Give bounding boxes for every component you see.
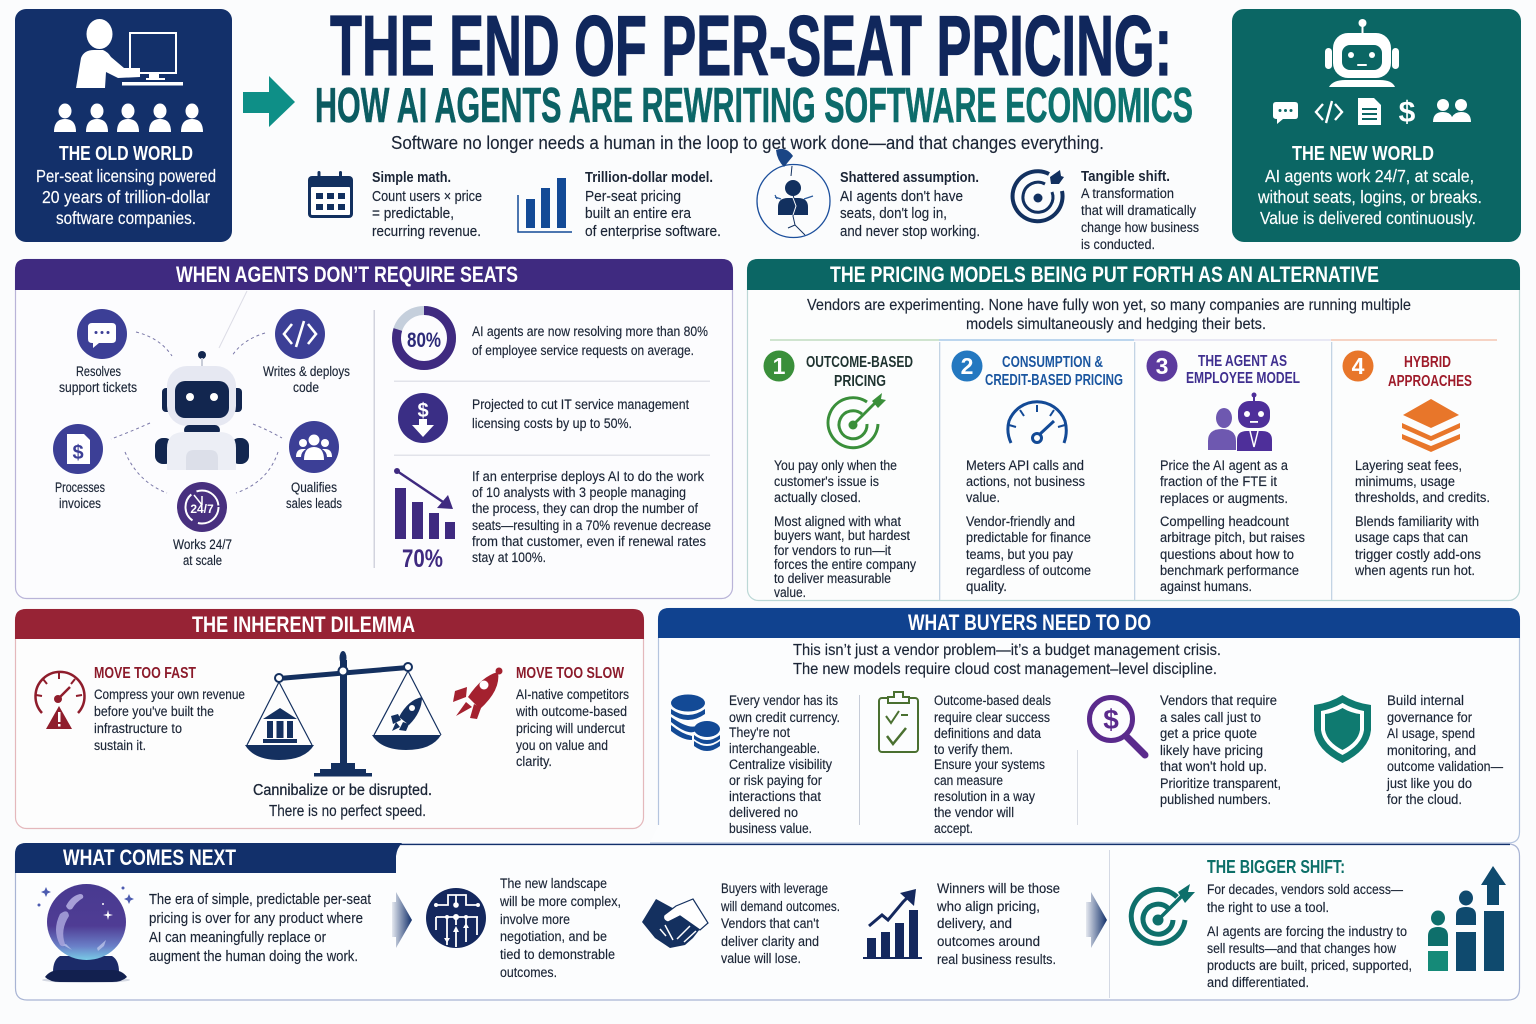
heading: the new world: THE NEW WORLD — [1292, 143, 1434, 165]
text: buyers with leverage: deliver clarity and — [721, 934, 819, 949]
icon: handshake — [642, 899, 708, 948]
text: buyers with leverage: will demand outcomes. — [720, 899, 840, 914]
item: simple math: recurring revenue. — [372, 224, 481, 240]
item: credit currency: own credit currency. — [729, 710, 840, 725]
text: the bigger shift: THE BIGGER SHIFT: — [1207, 857, 1345, 877]
item: published pricing: Prioritize transparent, — [1160, 776, 1281, 791]
text: buyers with leverage: Vendors that can't — [721, 916, 819, 931]
text: cannibalize or be disrupted: There is no perfect speed. — [269, 803, 426, 820]
text: intro: models simultaneously and hedging their bets. — [966, 316, 1266, 333]
item: credit currency: interactions that — [729, 789, 821, 804]
text: old world description — [36, 166, 216, 228]
column: consumption and credit-based pricing: Vendor-friendly and — [966, 514, 1075, 529]
column: outcome-based pricing: Most aligned with what — [774, 514, 901, 529]
item: published pricing: published numbers. — [1160, 792, 1271, 807]
text: the bigger shift — [1207, 857, 1412, 990]
text: intro — [793, 642, 1221, 678]
item: shattered assumption: Shattered assumption. — [840, 170, 979, 186]
text: new world description — [1257, 166, 1482, 228]
column: agent as employee: against humans. — [1160, 579, 1252, 594]
text: old world description: 20 years of trillion-dollar — [42, 187, 210, 207]
arrow: chevron — [392, 892, 412, 948]
column: outcome-based pricing: buyers want, but hardest — [774, 528, 910, 543]
column: consumption and credit-based pricing: quality. — [966, 579, 1007, 594]
text: intro: This isn’t just a vendor problem—it’s a budget management crisis. — [793, 642, 1221, 659]
label: qualifies sales leads: Qualifies — [291, 480, 337, 495]
icon: shattered person in circle — [757, 149, 830, 238]
text: the bigger shift: and differentiated. — [1207, 975, 1309, 990]
column: outcome-based pricing: You pay only when the — [774, 458, 897, 473]
item: published pricing: that won't hold up. — [1160, 759, 1267, 774]
item: published pricing — [1090, 693, 1281, 807]
item: simple math — [308, 170, 482, 240]
text: new world description: without seats, logins, or breaks. — [1257, 187, 1482, 207]
item: success definitions: the vendor will — [934, 805, 1014, 820]
text: cannibalize or be disrupted: Cannibalize or be disrupted. — [253, 782, 432, 799]
label: works 24/7 at scale: Works 24/7 — [173, 537, 232, 552]
column: hybrid approaches: when agents run hot. — [1354, 563, 1475, 578]
arrow: chevron — [1086, 892, 1107, 948]
icon: robot agent — [155, 351, 249, 470]
item: success definitions: definitions and data — [934, 726, 1041, 741]
column: consumption and credit-based pricing: regardless of outcome — [966, 563, 1091, 578]
column: consumption and credit-based pricing: CREDIT-BASED PRICING — [985, 372, 1123, 389]
text: buyers with leverage — [720, 881, 840, 966]
column: hybrid approaches: trigger costly add-ons — [1355, 547, 1481, 562]
panel: the inherent dilemma — [15, 609, 644, 828]
column: hybrid approaches — [1342, 350, 1490, 578]
column: hybrid approaches: HYBRID — [1404, 354, 1451, 371]
icon: magnifier with dollar: $ — [1103, 704, 1119, 735]
label: writes and deploys code — [263, 364, 350, 395]
text: buyers with leverage: value will lose. — [721, 951, 801, 966]
column: hybrid approaches: Blends familiarity with — [1355, 514, 1479, 529]
item: tangible shift — [1013, 169, 1199, 252]
column: outcome-based pricing: forces the entire company — [774, 557, 916, 572]
text: era of per-seat over: The era of simple, predictable per-seat — [149, 891, 372, 908]
icon: robot — [1325, 19, 1399, 87]
text: landscape: tied to demonstrable — [500, 947, 615, 962]
icon: target — [1013, 170, 1064, 221]
item: credit currency: delivered no — [729, 805, 798, 820]
column: outcome-based pricing: actually closed. — [774, 490, 861, 505]
arrow: old world to new world — [243, 76, 295, 127]
text: landscape: will be more complex, — [499, 894, 621, 909]
column: agent as employee: fraction of the FTE it — [1160, 474, 1277, 489]
text: move too fast: infrastructure to — [94, 721, 182, 736]
item: success definitions: Outcome-based deals — [934, 693, 1051, 708]
item: tangible shift: is conducted. — [1081, 237, 1155, 252]
text: new world description: AI agents work 24/7, at scale, — [1265, 166, 1474, 186]
item: success definitions — [879, 692, 1051, 836]
item: internal governance: for the cloud. — [1387, 792, 1462, 807]
item: success definitions: to verify them. — [934, 742, 1013, 757]
item: shattered assumption: and never stop working. — [840, 224, 980, 240]
item: internal governance — [1314, 693, 1503, 807]
label: works 24/7 at scale: at scale — [183, 553, 222, 568]
label: processes invoices: invoices — [59, 496, 101, 511]
item: tangible shift: Tangible shift. — [1081, 169, 1170, 185]
panel: what comes next — [15, 843, 1520, 1000]
item: published pricing: a sales call just to — [1160, 710, 1261, 725]
text: old world description: Per-seat licensing powered — [36, 166, 216, 186]
badge 2 — [952, 350, 982, 382]
column: consumption and credit-based pricing: actions, not business — [966, 474, 1085, 489]
text: the bigger shift: sell results—and that changes how — [1207, 941, 1396, 956]
text: 70% stat — [472, 469, 711, 565]
badge 3 — [1146, 350, 1178, 382]
item: trillion-dollar model — [518, 170, 721, 240]
text: 50% stat: Projected to cut IT service management — [472, 397, 689, 412]
column: agent as employee: EMPLOYEE MODEL — [1186, 370, 1300, 387]
icon: calendar — [308, 171, 353, 218]
column: hybrid approaches: usage caps that can — [1355, 530, 1468, 545]
badge 1 — [764, 350, 794, 382]
item: internal governance: outcome validation— — [1387, 759, 1503, 774]
column: agent as employee: arbitrage pitch, but raises — [1160, 530, 1305, 545]
column: agent as employee: Price the AI agent as a — [1160, 458, 1288, 473]
item: tangible shift: that will dramatically — [1081, 203, 1196, 218]
badge 2: 2 — [961, 353, 973, 379]
text: era of per-seat over: augment the human doing the work. — [149, 948, 358, 965]
label: works 24/7 at scale — [173, 537, 232, 568]
column: outcome-based pricing — [764, 350, 916, 600]
column: consumption and credit-based pricing: predictable for finance — [966, 530, 1091, 545]
item: internal governance: Build internal — [1387, 693, 1464, 708]
icon: red rocket — [453, 668, 502, 719]
header tab — [15, 843, 402, 873]
text: the bigger shift: For decades, vendors sold access— — [1207, 882, 1403, 897]
icon: dollar down — [398, 393, 448, 443]
text: the bigger shift: the right to use a tool. — [1207, 900, 1329, 915]
text: landscape: negotiation, and be — [500, 929, 607, 944]
icon: bank building on left pan — [263, 708, 297, 743]
panel: when agents don't require seats — [15, 259, 733, 598]
text: cannibalize or be disrupted — [253, 782, 432, 820]
badge 4: 4 — [1352, 353, 1365, 379]
badge 1: 1 — [773, 353, 786, 379]
column: consumption and credit-based pricing: teams, but you pay — [966, 547, 1073, 562]
text: new world description: Value is delivered continuously. — [1260, 208, 1476, 228]
column: consumption and credit-based pricing: value. — [966, 490, 1000, 505]
item: trillion-dollar model: Trillion-dollar model. — [585, 170, 713, 186]
item: credit currency: They're not — [729, 725, 790, 740]
text: move too slow: clarity. — [516, 754, 552, 769]
text: move too fast: Compress your own revenue — [94, 687, 245, 702]
item: simple math: Simple math. — [372, 170, 451, 186]
heading: WHAT BUYERS NEED TO DO — [908, 610, 1151, 635]
item: success definitions: can measure — [934, 773, 1003, 788]
item: tangible shift: A transformation — [1081, 186, 1174, 201]
icon: person and robot — [1208, 392, 1272, 451]
label: resolves support tickets — [59, 364, 137, 395]
item: shattered assumption: seats, don't log in, — [840, 206, 947, 222]
text: 80% stat: AI agents are now resolving more than 80% — [472, 324, 708, 339]
text: era of per-seat over — [149, 891, 372, 965]
item: credit currency — [671, 693, 840, 836]
column: consumption and credit-based pricing: Meters API calls and — [966, 458, 1084, 473]
text: old world description: software companies. — [56, 208, 196, 228]
text: 50% stat — [472, 397, 689, 431]
text: the bigger shift: products are built, priced, supported, — [1207, 958, 1412, 973]
item: internal governance: governance for — [1387, 710, 1472, 725]
icon: teal target — [1131, 884, 1195, 943]
item: credit currency: interchangeable. — [729, 741, 820, 756]
heading: THE INHERENT DILEMMA — [192, 612, 415, 637]
text: landscape: The new landscape — [500, 876, 607, 891]
item: simple math: Count users × price — [372, 189, 482, 205]
item: trillion-dollar model: of enterprise software. — [585, 224, 721, 240]
header bar — [15, 609, 644, 639]
text: move too slow: AI-native competitors — [516, 687, 629, 702]
item: published pricing: likely have pricing — [1160, 743, 1263, 758]
text: winners: delivery, and — [937, 916, 1012, 931]
icon: coin stacks — [671, 694, 720, 751]
label: resolves support tickets: support tickets — [59, 380, 137, 395]
column: consumption and credit-based pricing — [952, 350, 1123, 594]
text: move too slow: pricing will undercut — [516, 721, 625, 736]
text: intro: Vendors are experimenting. None have fully won yet, so many companies are running multiple — [807, 297, 1411, 314]
column: outcome-based pricing: OUTCOME-BASED — [806, 354, 913, 371]
icon: speedometer — [1008, 402, 1066, 443]
icon: people on rising bars — [1428, 866, 1506, 971]
text: move too fast: before you've built the — [94, 704, 214, 719]
item: credit currency: or risk paying for — [729, 773, 822, 788]
item: credit currency: Every vendor has its — [729, 693, 838, 708]
icon: row of seated users — [54, 104, 203, 132]
text: winners: who align pricing, — [936, 899, 1040, 914]
column: agent as employee: benchmark performance — [1160, 563, 1299, 578]
icon: code — [275, 309, 325, 359]
text: 70% stat: stay at 100%. — [472, 550, 546, 565]
icon: clock 24/7 — [177, 482, 227, 532]
label: writes and deploys code: Writes & deploys — [263, 364, 350, 379]
icon: support tickets — [77, 309, 127, 359]
column: agent as employee — [1146, 350, 1305, 594]
item: tangible shift: change how business — [1081, 220, 1199, 235]
item: internal governance: monitoring, and — [1387, 743, 1476, 758]
icon: crystal ball — [38, 884, 134, 983]
icon: dollar down: $ — [417, 400, 429, 422]
icon: growth chart — [863, 889, 922, 959]
column: outcome-based pricing: value. — [774, 585, 806, 600]
text: buyers with leverage: Buyers with leverage — [721, 881, 828, 896]
item: published pricing: get a price quote — [1160, 726, 1257, 741]
icon: agent task icons — [1273, 96, 1471, 129]
item: shattered assumption: AI agents don't have — [840, 189, 963, 205]
text: move too slow: you on value and — [516, 738, 608, 753]
text: 70% stat: of 10 analysts with 3 people managing — [472, 485, 686, 500]
column: hybrid approaches: Layering seat fees, — [1355, 458, 1462, 473]
icon: rocket on right pan — [391, 697, 422, 731]
badge 4 — [1342, 350, 1374, 382]
column: agent as employee: Compelling headcount — [1160, 514, 1289, 529]
panel: the old world — [15, 9, 232, 242]
column: consumption and credit-based pricing: CONSUMPTION & — [1002, 354, 1103, 371]
text: 80% stat: of employee service requests on average. — [472, 343, 694, 358]
column: outcome-based pricing: for vendors to run—it — [774, 543, 891, 558]
label: qualifies sales leads — [286, 480, 342, 511]
column: outcome-based pricing: to deliver measurable — [774, 571, 891, 586]
chart: declining bars 70% — [394, 468, 455, 573]
text: move too slow — [515, 665, 629, 769]
icon: agent task icons: $ — [1399, 96, 1416, 129]
text: winners: Winners will be those — [937, 881, 1060, 896]
text: move too fast: MOVE TOO FAST — [94, 665, 196, 682]
heading: THE PRICING MODELS BEING PUT FORTH AS AN ALTERNATIVE — [830, 262, 1379, 287]
heading: the old world: THE OLD WORLD — [59, 143, 193, 165]
text: move too fast — [94, 665, 245, 753]
icon: balance scale — [245, 651, 441, 776]
text: 80% stat — [472, 324, 708, 358]
item: internal governance: just like you do — [1386, 776, 1472, 791]
header bar — [658, 608, 1520, 638]
item: success definitions: resolution in a way — [934, 789, 1035, 804]
text: landscape: involve more — [500, 912, 570, 927]
icon: clipboard — [879, 692, 918, 752]
item: credit currency: Centralize visibility — [729, 757, 832, 772]
icon: gauge with warning — [36, 672, 85, 729]
column: hybrid approaches: minimums, usage — [1355, 474, 1455, 489]
icon: magnifier with dollar — [1090, 698, 1145, 755]
label: processes invoices — [55, 480, 105, 511]
text: 70% stat: seats—resulting in a 70% revenue decrease — [472, 518, 711, 533]
text: move too slow: MOVE TOO SLOW — [516, 665, 624, 682]
label: writes and deploys code: code — [293, 380, 319, 395]
stat: 80% donut — [396, 310, 452, 366]
text: landscape — [499, 876, 621, 980]
label: resolves support tickets: Resolves — [76, 364, 121, 379]
icon: layers — [1402, 399, 1460, 452]
text: move too slow: with outcome-based — [515, 704, 627, 719]
text: 70% stat: If an enterprise deploys AI to do the work — [472, 469, 704, 484]
icon: shield — [1314, 695, 1371, 763]
icon: clock 24/7: 24/7 — [190, 502, 214, 516]
text: intro: The new models require cloud cost management–level discipline. — [793, 661, 1217, 678]
panel: the new world — [1232, 9, 1521, 242]
item: success definitions: Ensure your systems — [934, 757, 1045, 772]
item: trillion-dollar model: built an entire era — [585, 206, 692, 222]
item: trillion-dollar model: Per-seat pricing — [585, 189, 681, 205]
badge 3: 3 — [1156, 353, 1168, 379]
chart: declining bars 70%: 70% — [402, 545, 443, 573]
text: era of per-seat over: AI can meaningfully replace or — [149, 929, 326, 946]
text: the bigger shift: AI agents are forcing the industry to — [1207, 924, 1407, 939]
column: agent as employee: replaces or augments. — [1160, 491, 1288, 506]
header bar — [747, 259, 1520, 290]
text: winners — [936, 881, 1060, 967]
label: qualifies sales leads: sales leads — [286, 496, 342, 511]
label: processes invoices: Processes — [55, 480, 105, 495]
icon: green target — [828, 393, 886, 448]
header bar — [15, 259, 733, 290]
heading: WHEN AGENTS DON’T REQUIRE SEATS — [176, 262, 518, 287]
stat: 80% donut: 80% — [407, 329, 441, 352]
column: hybrid approaches: thresholds, and credits. — [1355, 490, 1490, 505]
item: success definitions: accept. — [934, 821, 973, 836]
text: winners: outcomes around — [937, 934, 1040, 949]
text: era of per-seat over: pricing is over for any product where — [149, 910, 363, 927]
column: outcome-based pricing: customer's issue is — [774, 474, 879, 489]
text: move too fast: sustain it. — [94, 738, 146, 753]
item: published pricing: Vendors that require — [1160, 693, 1277, 708]
text: intro — [807, 297, 1411, 333]
column: hybrid approaches: APPROACHES — [1388, 373, 1472, 390]
icon: invoice: $ — [72, 442, 84, 464]
icon: person at computer — [76, 19, 183, 88]
text: winners: real business results. — [937, 952, 1056, 967]
icon: sales leads — [289, 421, 339, 473]
text: 70% stat: the process, they can drop the number of — [472, 501, 698, 516]
tagline: Software no longer needs a human in the loop to get work done—and that changes everything. — [391, 133, 1104, 153]
text: landscape: outcomes. — [500, 965, 557, 980]
heading: WHAT COMES NEXT — [63, 845, 236, 870]
item: internal governance: AI usage, spend — [1387, 726, 1475, 741]
text: 70% stat: from that customer, even if renewal rates — [472, 534, 706, 549]
column: outcome-based pricing: PRICING — [834, 373, 886, 390]
panel: pricing models — [747, 259, 1520, 600]
item: shattered assumption — [757, 149, 980, 240]
text: 50% stat: licensing costs by up to 50%. — [472, 416, 632, 431]
item: credit currency: business value. — [729, 821, 812, 836]
column: agent as employee: questions about how to — [1160, 547, 1294, 562]
icon: invoice — [53, 424, 103, 474]
item: simple math: = predictable, — [372, 206, 454, 222]
item: success definitions: require clear success — [934, 710, 1050, 725]
column: agent as employee: THE AGENT AS — [1198, 353, 1287, 370]
panel: what buyers need to do — [650, 608, 1520, 843]
icon: bar chart — [518, 178, 572, 232]
icon: circuit network — [426, 888, 486, 948]
